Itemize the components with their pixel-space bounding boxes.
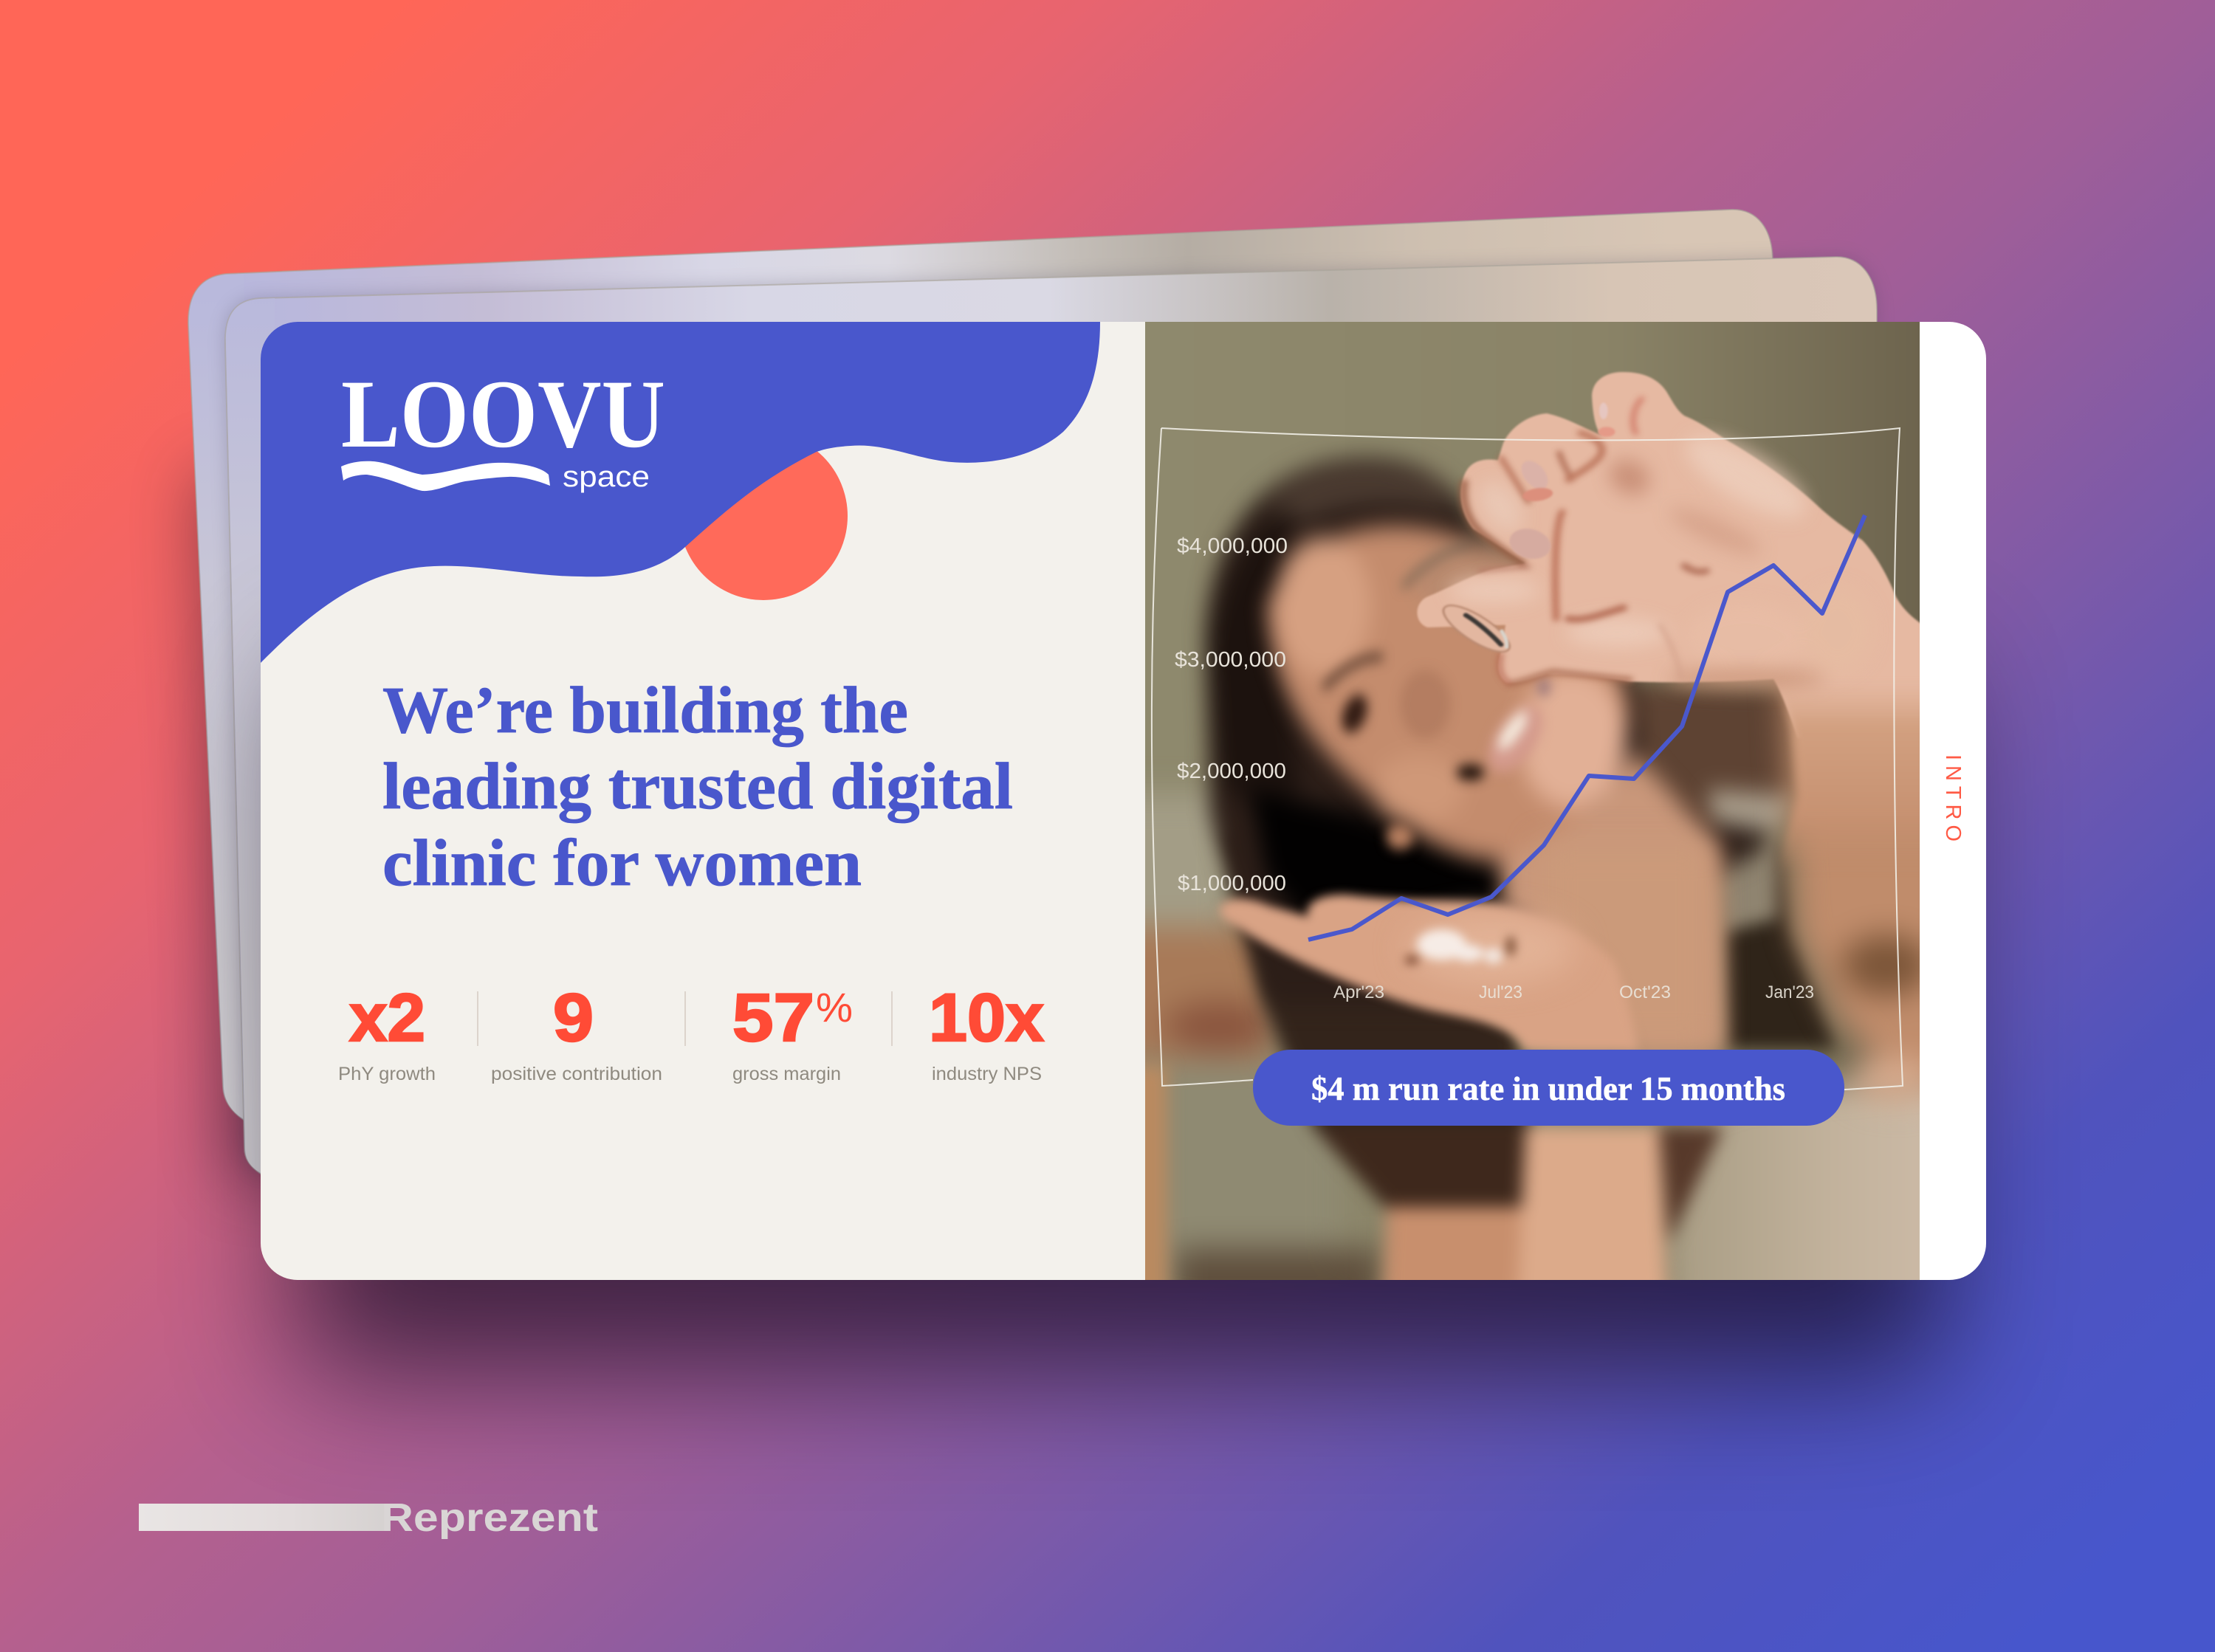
stat: 9: 9 — [553, 980, 594, 1056]
card cream panel — [261, 322, 1145, 1280]
logo wordmark: LOOVU — [341, 359, 665, 468]
white side strip — [1920, 317, 1993, 1284]
logo: LOOVU space — [341, 359, 665, 493]
logo wave — [341, 461, 550, 491]
hair — [1205, 458, 1798, 1054]
finger creases — [1463, 399, 1706, 684]
back cards shadow — [196, 472, 310, 1181]
x axis labels: Jul'23 — [1479, 982, 1522, 1002]
face — [1267, 526, 1725, 1054]
y axis labels: $3,000,000 — [1175, 648, 1286, 672]
side label: INTRO: INTRO — [1941, 754, 1965, 842]
logo subtext: space — [563, 461, 650, 493]
footer brand: Reprezent — [139, 1496, 598, 1540]
stats row — [338, 980, 1044, 1084]
callout pill: $4 m run rate in under 15 months — [1311, 1070, 1785, 1107]
finger nails — [1503, 402, 1615, 565]
stat: 10x: 10x — [929, 980, 1044, 1056]
x axis labels: Jan'23 — [1765, 982, 1814, 1002]
x axis labels: Apr'23 — [1333, 982, 1384, 1002]
y axis labels: $2,000,000 — [1177, 760, 1286, 783]
x axis labels — [1333, 982, 1814, 1002]
coral circle — [685, 452, 848, 600]
y axis labels — [1175, 534, 1288, 895]
stat: x2: PhY growth — [338, 1064, 436, 1084]
brand name: Reprezent — [381, 1496, 598, 1540]
stat: 57%: 57 — [732, 980, 814, 1056]
back card 1 — [188, 210, 1773, 1129]
photo background — [1145, 322, 1920, 1280]
y axis labels: $1,000,000 — [1178, 872, 1286, 895]
stat: 57%: gross margin — [732, 1064, 841, 1084]
back card 2 — [225, 257, 1877, 1181]
hand highlights and shading — [1449, 424, 1875, 689]
chart: run rate — [1152, 428, 1903, 1091]
stat: x2: x2 — [349, 980, 425, 1056]
brand bar — [139, 1504, 390, 1531]
upper hand with capsule — [1417, 372, 1936, 738]
facial features — [1324, 545, 1553, 850]
chart frame — [1152, 428, 1903, 1091]
neck and right arm — [1540, 666, 2005, 1101]
stat: 57% — [732, 980, 853, 1084]
headline — [382, 674, 1013, 900]
revenue line — [1308, 515, 1865, 940]
headline: We’re building the — [382, 674, 908, 747]
stat: 9 — [491, 980, 662, 1084]
photo lower background and body — [1145, 787, 1920, 1280]
stat: x2 — [338, 980, 436, 1084]
capsule — [1435, 598, 1517, 659]
stat: 57%: % — [816, 984, 853, 1030]
callout pill — [1253, 1050, 1844, 1126]
headline: leading trusted digital — [382, 750, 1013, 823]
photo panel — [1145, 322, 1920, 1280]
headline: clinic for women — [382, 827, 862, 900]
hand silhouette — [1417, 372, 1936, 738]
main card shadow — [295, 664, 1942, 1373]
wrist blend into arm — [1776, 635, 1949, 871]
y axis labels: $4,000,000 — [1177, 534, 1288, 558]
lower hand with pills — [1219, 895, 1639, 1050]
stat: 9: positive contribution — [491, 1064, 662, 1084]
blue wave blob — [261, 322, 1100, 663]
stat: 10x: industry NPS — [932, 1064, 1042, 1084]
main card — [261, 322, 1986, 1280]
x axis labels: Oct'23 — [1619, 982, 1671, 1002]
